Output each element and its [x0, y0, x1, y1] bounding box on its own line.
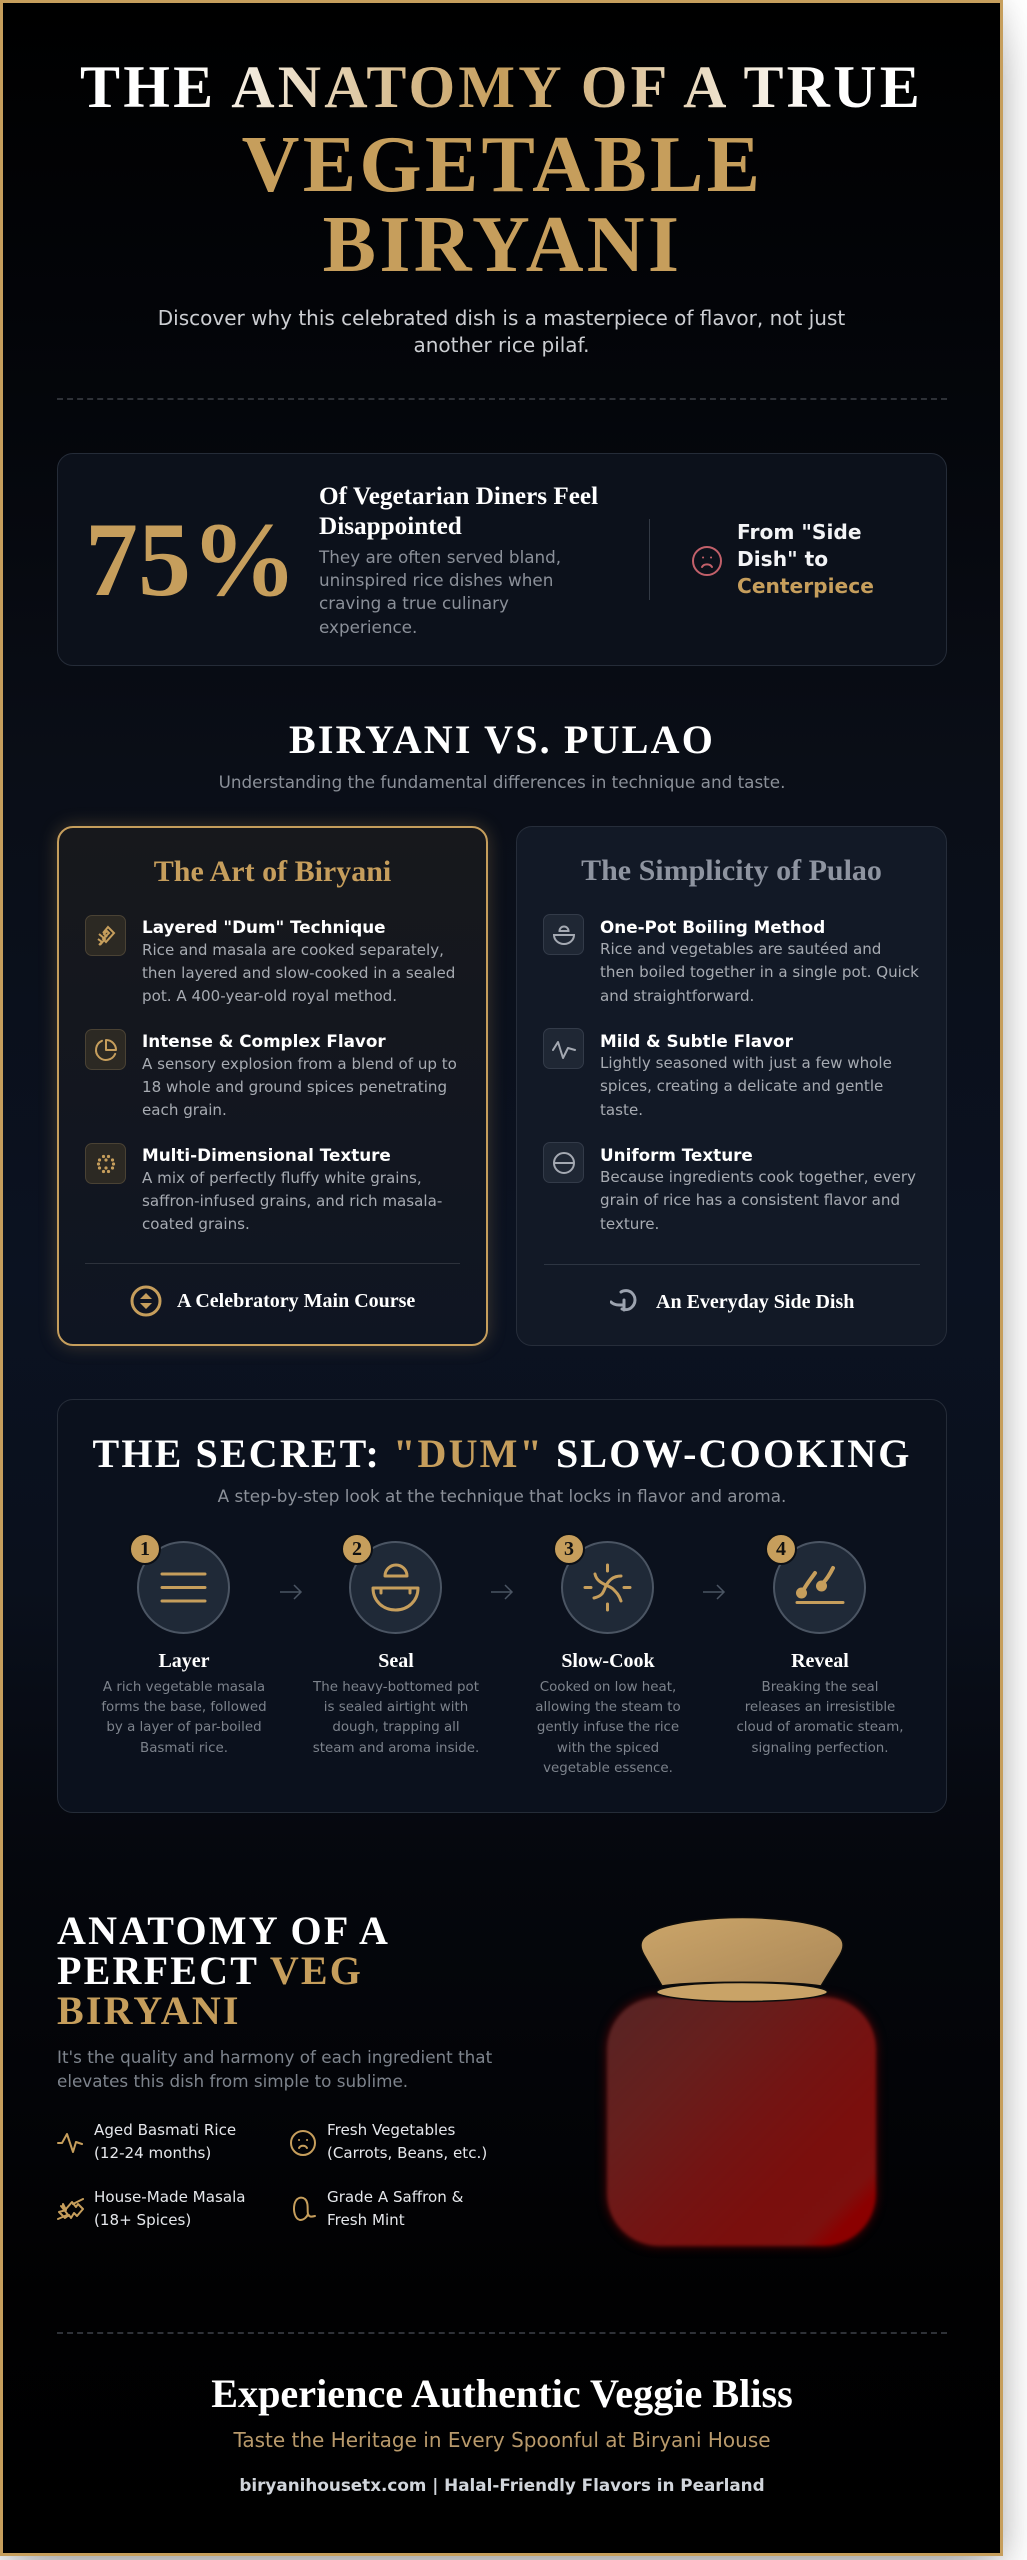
icon: saffron strand: [293, 2196, 316, 2221]
item: intense and complex flavor: each grain.: [142, 1101, 227, 1119]
stat description: craving a true culinary: [319, 593, 509, 613]
step number 2: [341, 1533, 373, 1565]
item: layered dum technique: Layered "Dum" Technique: [142, 917, 386, 937]
pulao verdict: An Everyday Side Dish: [656, 1291, 854, 1313]
section: anatomy of a perfect veg biryani: [57, 1908, 492, 2229]
item: intense and complex flavor: A sensory explosion from a blend of up to: [142, 1055, 457, 1073]
step 1: layer: Basmati rice.: [140, 1741, 228, 1756]
anatomy description: It's the quality and harmony of each ingredient that: [57, 2047, 492, 2067]
step number 4: 4: [776, 1538, 786, 1560]
step 2: seal: is sealed airtight with: [324, 1700, 468, 1715]
step 4: reveal: Reveal: [791, 1650, 849, 1672]
step 2: seal: steam and aroma inside.: [313, 1741, 479, 1756]
anatomy heading: [57, 1908, 390, 2033]
callout: side dish to centerpiece: Dish" to: [737, 546, 828, 570]
icon: sealed pot: [349, 1541, 442, 1634]
item: multi-dimensional texture: coated grains.: [142, 1215, 250, 1233]
icon: pulse: [543, 1028, 584, 1069]
subtitle: another rice pilaf.: [413, 333, 590, 357]
anatomy description: [57, 2047, 492, 2091]
item: mild and subtle flavor: [543, 1028, 892, 1119]
step number 3: 3: [564, 1538, 574, 1560]
icon: face: [290, 2130, 316, 2156]
item: uniform texture: texture.: [600, 1215, 659, 1233]
item: one-pot boiling method: One-Pot Boiling Method: [600, 917, 825, 937]
pot body: [607, 1997, 876, 2246]
step 2: seal: The heavy-bottomed pot: [313, 1680, 479, 1695]
item: layered dum technique: pot. A 400-year-old royal method.: [142, 987, 397, 1005]
item: mild and subtle flavor: Lightly seasoned with just a few whole: [600, 1054, 892, 1072]
step 2: seal: Seal: [378, 1650, 414, 1672]
step 1: layer: by a layer of par-boiled: [106, 1720, 262, 1735]
arrow: [280, 1584, 302, 1600]
step number 1: [129, 1533, 161, 1565]
anatomy heading: PERFECT VEG: [57, 1948, 363, 1993]
title line two: BIRYANI: [323, 201, 682, 289]
item: mild and subtle flavor: spices, creating a delicate and gentle: [600, 1077, 883, 1095]
ingredient: fresh vegetables: [290, 2121, 487, 2162]
callout: side dish to centerpiece: [737, 520, 874, 598]
step 3: slow-cook: Cooked on low heat,: [540, 1680, 676, 1695]
process subheading: A step-by-step look at the technique that locks in flavor and aroma.: [218, 1486, 786, 1506]
item: one-pot boiling method: and straightforward.: [600, 987, 754, 1005]
biryani verdict: A Celebratory Main Course: [177, 1290, 415, 1312]
item: intense and complex flavor: [85, 1029, 457, 1119]
item: one-pot boiling method: then boiled together in a single pot. Quick: [600, 963, 919, 981]
step 3: slow-cook: allowing the steam to: [535, 1700, 681, 1715]
ingredient: house-made masala: [57, 2188, 246, 2229]
icon: uniform circle: [543, 1142, 584, 1183]
illustration: biryani pot: [601, 1918, 882, 2252]
title line two: [242, 121, 763, 289]
subtitle: [158, 306, 845, 357]
pot lid: [642, 1918, 842, 2002]
step 4: reveal: Breaking the seal: [762, 1680, 878, 1695]
item: layered dum technique: then layered and slow-cooked in a sealed: [142, 964, 455, 982]
callout: side dish to centerpiece: From "Side: [737, 520, 862, 544]
item: multi-dimensional texture: [85, 1143, 442, 1233]
footer website: biryanihousetx.com | Halal-Friendly Flavors in Pearland: [239, 2475, 765, 2495]
item: one-pot boiling method: [543, 914, 919, 1005]
ingredient: basmati rice: Aged Basmati Rice: [94, 2121, 236, 2139]
anatomy description: elevates this dish from simple to sublime.: [57, 2071, 408, 2091]
icon: celebratory badge: [130, 1286, 162, 1316]
step 3: slow-cook: vegetable essence.: [543, 1761, 673, 1776]
icon: layers: [85, 914, 126, 956]
item: uniform texture: Uniform Texture: [600, 1145, 753, 1165]
step 1: layer: A rich vegetable masala: [103, 1680, 265, 1695]
item: intense and complex flavor: 18 whole and ground spices penetrating: [142, 1078, 447, 1096]
step 4: reveal: releases an irresistible: [745, 1700, 895, 1715]
step number 2: 2: [352, 1538, 362, 1560]
item: uniform texture: [543, 1142, 916, 1233]
stat description: uninspired rice dishes when: [319, 570, 553, 590]
stat description: They are often served bland,: [319, 546, 561, 566]
subtitle: Discover why this celebrated dish is a masterpiece of flavor, not just: [158, 306, 845, 330]
stat heading: Disappointed: [319, 513, 462, 540]
step 4: reveal: [736, 1535, 904, 1756]
step 2: seal: [312, 1535, 479, 1756]
panel: 75% statistic: [57, 453, 947, 666]
ingredient: house-made masala: (18+ Spices): [94, 2211, 191, 2229]
title line one: THE ANATOMY OF A TRUE: [80, 54, 923, 120]
stat heading: Of Vegetarian Diners Feel: [319, 483, 598, 510]
footer title: Experience Authentic Veggie Bliss: [211, 2371, 793, 2416]
icon: pulse: [57, 2133, 83, 2153]
callout: side dish to centerpiece: Centerpiece: [737, 574, 874, 598]
step 3: slow-cook: Slow-Cook: [561, 1650, 655, 1672]
item: mild and subtle flavor: taste.: [600, 1101, 643, 1119]
step 1: layer: forms the base, followed: [101, 1700, 267, 1715]
step 3: slow-cook: [535, 1535, 681, 1776]
arrow: [491, 1584, 513, 1600]
biryani card title: The Art of Biryani: [154, 855, 391, 888]
step number 1: 1: [140, 1538, 150, 1560]
step 3: slow-cook: gently infuse the rice: [537, 1720, 679, 1735]
ingredient: basmati rice: [57, 2121, 236, 2162]
icon: grains: [85, 1142, 126, 1184]
item: multi-dimensional texture: A mix of perfectly fluffy white grains,: [142, 1169, 422, 1187]
icon: bowl: [543, 914, 584, 955]
ingredient: fresh vegetables: Fresh Vegetables: [327, 2121, 455, 2139]
item: uniform texture: grain of rice has a consistent flavor and: [600, 1191, 900, 1209]
icon: everyday dish arrow: [610, 1289, 636, 1312]
ingredient: saffron and mint: Fresh Mint: [327, 2211, 405, 2229]
step 2: seal: dough, trapping all: [332, 1720, 460, 1735]
step 1: layer: Layer: [158, 1650, 210, 1672]
item: one-pot boiling method: Rice and vegetables are sautéed and: [600, 940, 881, 958]
item: uniform texture: Because ingredients cook together, every: [600, 1168, 916, 1186]
icon: layers lines: [137, 1541, 230, 1634]
step number 3: [553, 1533, 585, 1565]
item: mild and subtle flavor: Mild & Subtle Flavor: [600, 1031, 793, 1051]
step 1: layer: [101, 1535, 267, 1756]
arrow: [703, 1584, 725, 1600]
anatomy heading: ANATOMY OF A: [57, 1908, 390, 1953]
panel: the art of biryani: [57, 826, 488, 1346]
ingredient: saffron and mint: Grade A Saffron &: [327, 2188, 463, 2206]
item: multi-dimensional texture: Multi-Dimensional Texture: [142, 1145, 391, 1165]
header: [80, 54, 923, 357]
step 3: slow-cook: with the spiced: [557, 1741, 659, 1756]
step number 4: [765, 1533, 797, 1565]
subheading: comparison: Understanding the fundamental differences in technique and taste.: [219, 772, 785, 792]
icon: sad face: [692, 546, 722, 576]
footer: [211, 2371, 793, 2495]
icon: spices: [57, 2198, 84, 2220]
stat description: [318, 546, 561, 637]
panel: dum slow-cooking process: [57, 1399, 947, 1813]
item: layered dum technique: [85, 915, 455, 1005]
ingredient: fresh vegetables: (Carrots, Beans, etc.): [327, 2144, 487, 2162]
ingredient: basmati rice: (12-24 months): [94, 2144, 211, 2162]
stat heading: [319, 483, 598, 540]
item: multi-dimensional texture: saffron-infused grains, and rich masala-: [142, 1192, 442, 1210]
anatomy heading: BIRYANI: [57, 1988, 241, 2033]
ingredient: house-made masala: House-Made Masala: [94, 2188, 246, 2206]
heading: biryani vs pulao: BIRYANI VS. PULAO: [289, 717, 715, 762]
item: layered dum technique: Rice and masala are cooked separately,: [142, 941, 444, 959]
big statistic: 75%: [85, 501, 297, 618]
icon: steam swirl: [561, 1541, 654, 1634]
stat description: experience.: [319, 617, 417, 637]
icon: rising aroma: [773, 1541, 866, 1634]
panel: the simplicity of pulao: [516, 826, 947, 1346]
footer tagline: Taste the Heritage in Every Spoonful at Biryani House: [233, 2428, 771, 2452]
item: intense and complex flavor: Intense & Complex Flavor: [142, 1031, 386, 1051]
ingredient: saffron and mint: [293, 2188, 463, 2229]
step 4: reveal: cloud of aromatic steam,: [736, 1720, 904, 1735]
step 4: reveal: signaling perfection.: [751, 1741, 889, 1756]
title line two: VEGETABLE: [242, 121, 763, 209]
process heading: THE SECRET: "DUM" SLOW-COOKING: [92, 1431, 912, 1476]
pulao card title: The Simplicity of Pulao: [581, 854, 882, 887]
icon: pie chart: [85, 1028, 126, 1070]
